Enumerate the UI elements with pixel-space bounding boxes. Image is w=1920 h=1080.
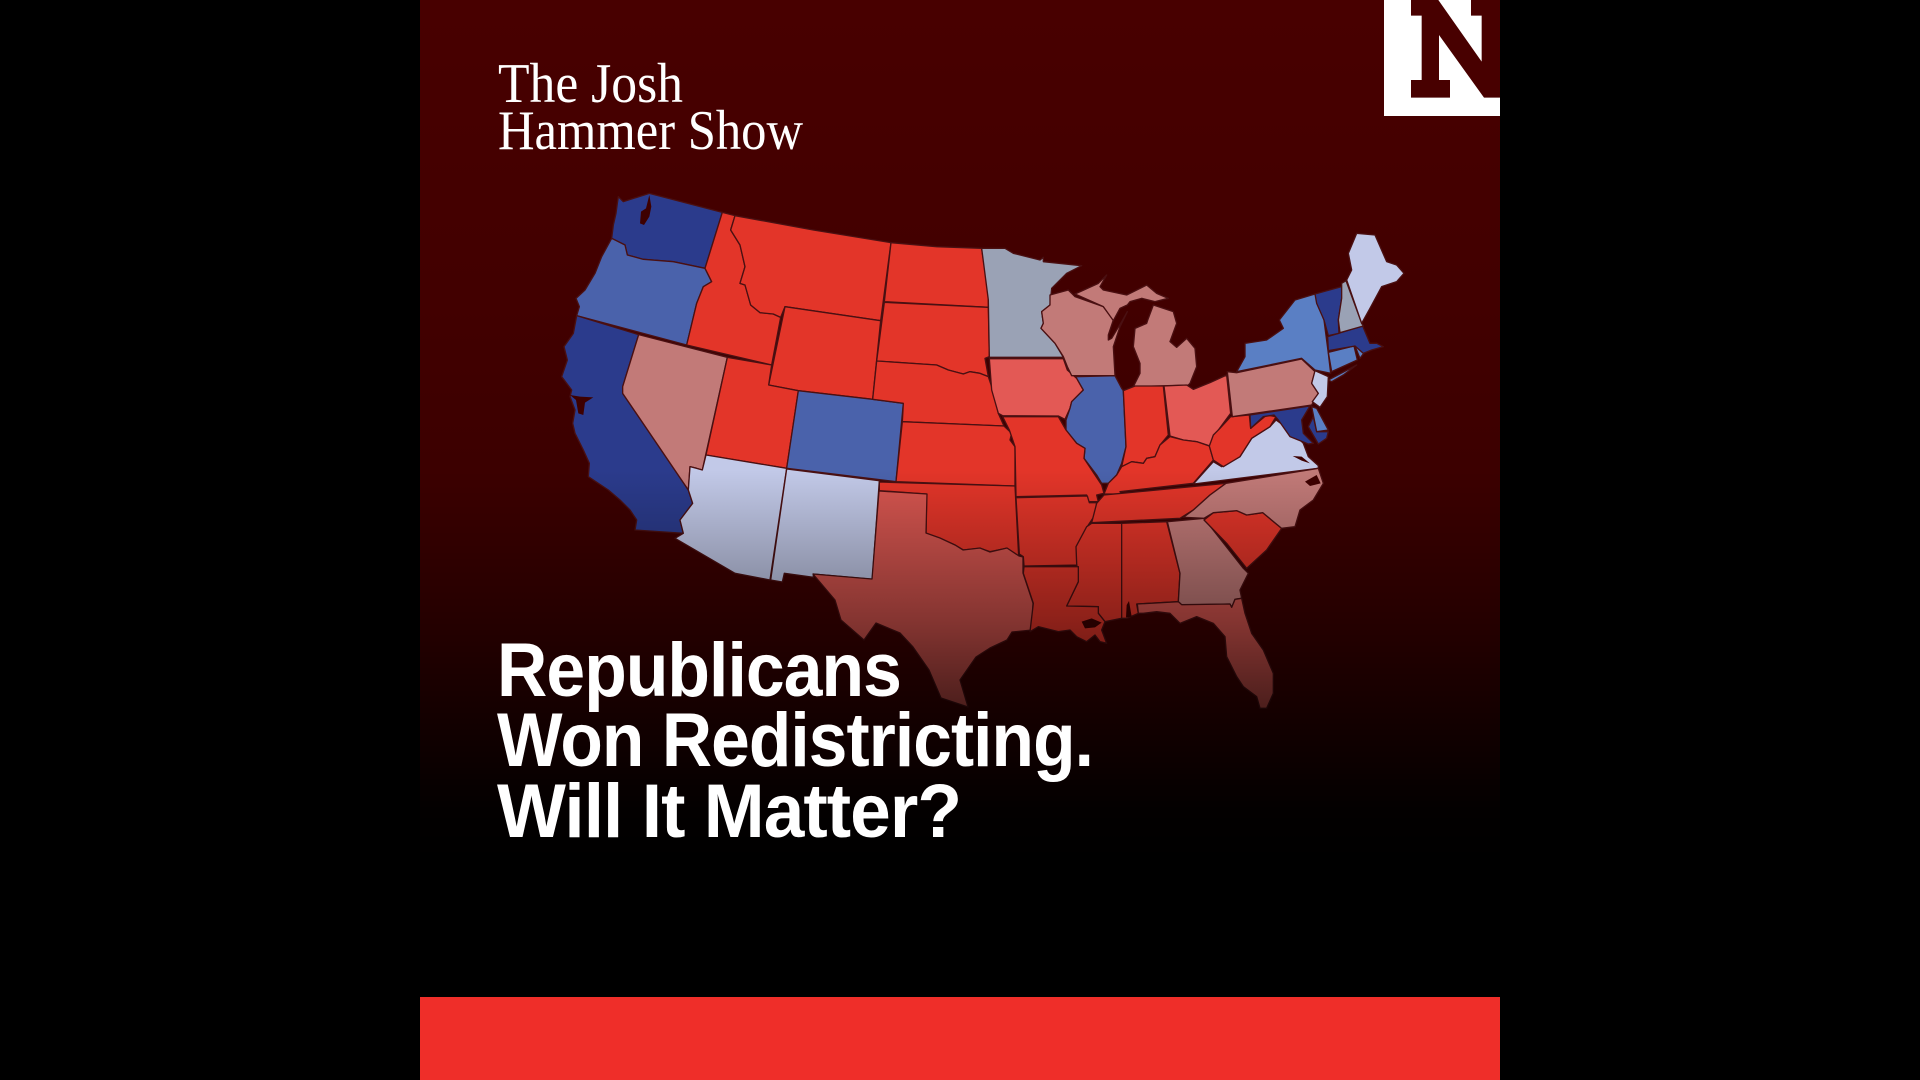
water: San Francisco Bay xyxy=(570,395,593,415)
state: Kentucky xyxy=(1104,437,1213,494)
state: North Carolina xyxy=(1183,468,1323,528)
state: New Hampshire xyxy=(1338,281,1363,333)
episode headline: Will It Matter? xyxy=(497,769,961,854)
state: New Mexico xyxy=(771,469,879,582)
state: South Carolina xyxy=(1204,511,1282,568)
logo: Newsweek N xyxy=(1384,0,1500,116)
state: Mississippi xyxy=(1067,523,1122,622)
state: New York xyxy=(1237,294,1331,373)
state: Montana xyxy=(731,216,891,321)
state: Maryland xyxy=(1250,406,1313,444)
logo background xyxy=(1384,0,1500,116)
state: Utah xyxy=(706,357,798,468)
state: Connecticut xyxy=(1328,346,1357,372)
state: Arizona xyxy=(675,455,787,580)
state: Pennsylvania xyxy=(1227,359,1318,417)
show title: Hammer Show xyxy=(498,100,803,162)
panel: square cover background xyxy=(420,0,1500,997)
western states xyxy=(562,193,1019,582)
state: Louisiana xyxy=(1023,567,1107,643)
state: New Jersey xyxy=(1312,371,1328,407)
state: Tennessee xyxy=(1092,483,1226,523)
state: Oklahoma xyxy=(879,482,1019,556)
water: Puget Sound xyxy=(640,195,651,225)
state: Oregon xyxy=(576,238,712,345)
state: Delaware xyxy=(1312,407,1328,432)
show title: The Josh xyxy=(498,53,683,115)
state: Alabama xyxy=(1122,522,1180,618)
water: Virginia rivers xyxy=(1293,456,1310,463)
episode headline xyxy=(497,628,1093,854)
state: Indiana xyxy=(1122,386,1168,467)
water: Mobile Bay xyxy=(1126,601,1132,617)
water: Pamlico Sound xyxy=(1305,475,1321,486)
state: Arkansas xyxy=(1016,496,1097,566)
episode headline: Republicans xyxy=(497,628,901,713)
red footer bar xyxy=(420,997,1500,1080)
state: Maine xyxy=(1347,233,1404,323)
state: Michigan upper peninsula xyxy=(1075,275,1168,321)
state: Massachusetts xyxy=(1328,326,1383,353)
state: West Virginia xyxy=(1209,415,1276,467)
state: Michigan lower peninsula xyxy=(1133,305,1197,387)
logo letter N xyxy=(1411,0,1500,98)
state: Ohio xyxy=(1164,375,1231,446)
state: Nevada xyxy=(623,335,727,490)
state: Minnesota xyxy=(982,248,1082,357)
state: Washington xyxy=(612,193,722,268)
state: South Dakota xyxy=(877,302,989,377)
eastern states xyxy=(982,233,1404,708)
state: Nebraska xyxy=(873,361,1004,426)
state: Colorado xyxy=(787,391,903,482)
state: Texas xyxy=(813,491,1033,707)
state: Wisconsin xyxy=(1041,290,1127,376)
show title xyxy=(498,53,803,162)
state: New York Long Island xyxy=(1328,365,1357,382)
state: Illinois xyxy=(1066,376,1126,483)
state: Kansas xyxy=(896,422,1015,486)
state: California xyxy=(562,316,693,533)
state: Vermont xyxy=(1315,287,1342,336)
state: Idaho xyxy=(687,212,781,365)
state: Wyoming xyxy=(769,307,881,399)
episode headline: Won Redistricting. xyxy=(497,698,1093,783)
state: Maryland eastern shore xyxy=(1308,417,1328,444)
water: Lake Pontchartrain xyxy=(1082,618,1102,628)
state: Missouri xyxy=(1003,417,1104,502)
state: North Dakota xyxy=(884,243,988,307)
gradient fade to black xyxy=(420,470,1500,997)
state: Rhode Island xyxy=(1355,345,1365,358)
state: Georgia xyxy=(1167,518,1248,607)
state: Iowa xyxy=(989,359,1083,419)
state: Virginia xyxy=(1193,420,1318,484)
state: Florida xyxy=(1137,598,1273,708)
map: United States by state xyxy=(562,193,1404,708)
